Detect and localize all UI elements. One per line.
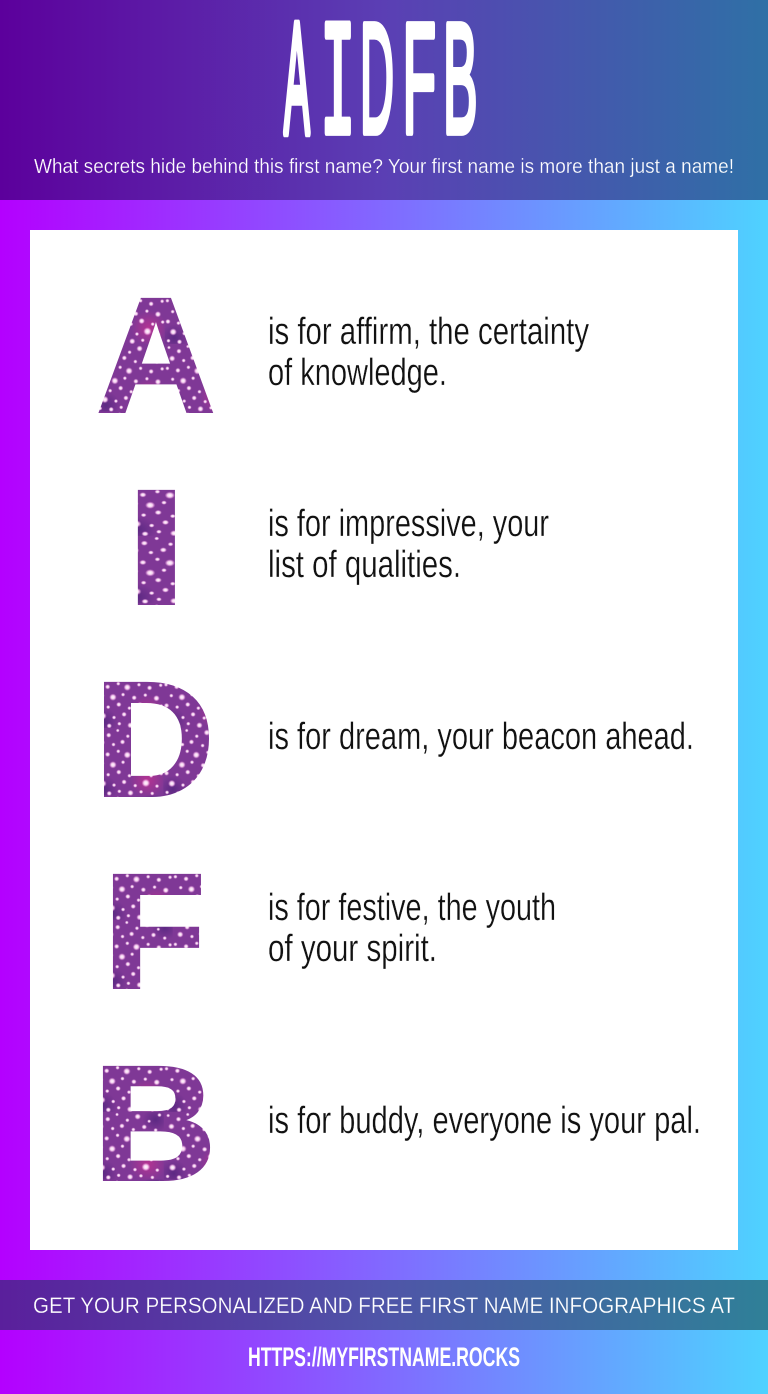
description A: of knowledge. (268, 352, 447, 394)
title (284, 0, 478, 183)
letter row I (125, 456, 549, 639)
star letter B: B (93, 1033, 216, 1215)
description A (268, 311, 589, 394)
description F: of your spirit. (268, 928, 437, 970)
star letter F: F (103, 840, 206, 1023)
letter row B (93, 1033, 701, 1215)
star letter I: I (125, 456, 188, 639)
star letter A: A (96, 264, 215, 446)
star letter D: D (94, 648, 214, 830)
description I: list of qualities. (268, 544, 461, 586)
description A: is for affirm, the certainty (268, 311, 589, 353)
header band (0, 0, 768, 200)
description I: is for impressive, your (268, 503, 549, 545)
letter row D (94, 648, 694, 830)
tagline: What secrets hide behind this first name? Your first name is more than just a name! (34, 155, 734, 178)
description F (268, 887, 556, 970)
description I (268, 503, 549, 586)
footer band (0, 1280, 768, 1330)
description F: is for festive, the youth (268, 887, 556, 929)
letter row F (103, 840, 556, 1023)
white panel (30, 230, 738, 1250)
title: I (320, 0, 356, 183)
footer url: HTTPS://MYFIRSTNAME.ROCKS (248, 1342, 520, 1372)
letter row A (96, 264, 589, 446)
footer call to action: GET YOUR PERSONALIZED AND FREE FIRST NAME INFOGRAPHICS AT (33, 1293, 735, 1318)
